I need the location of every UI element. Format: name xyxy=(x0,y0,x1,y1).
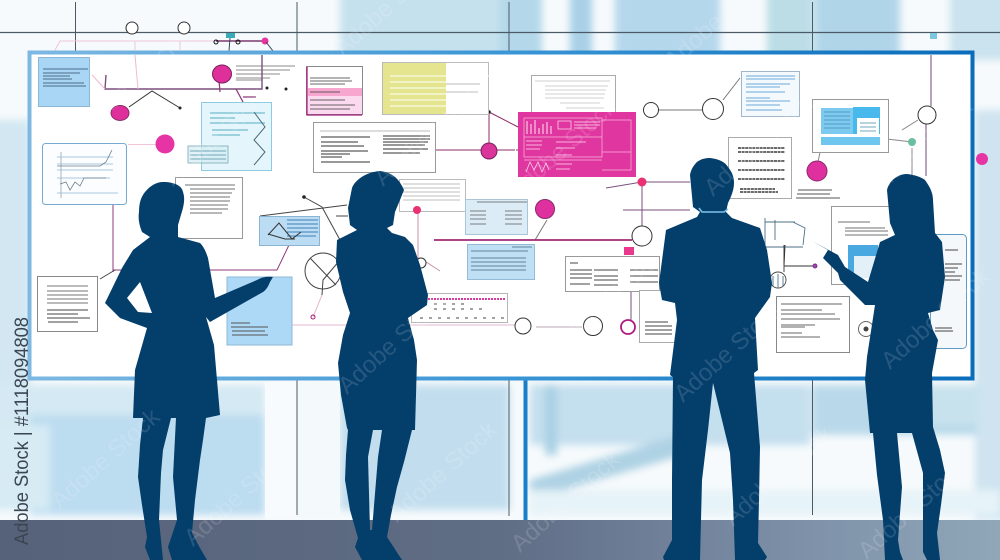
top right blue-lined document xyxy=(742,72,800,116)
document text panel near top left xyxy=(236,66,295,80)
sheet behind first woman xyxy=(176,178,242,238)
floor xyxy=(0,520,1000,560)
white doc behind magenta card xyxy=(532,76,616,116)
man silhouette xyxy=(659,158,772,560)
woman 3 silhouette xyxy=(812,174,945,560)
node circles xyxy=(111,65,988,336)
doc above center xyxy=(400,180,466,214)
stock credit: Adobe Stock | #1118094808 xyxy=(12,317,33,545)
watermarks: Adobe Stock xyxy=(876,263,996,374)
watermarks: Adobe Stock xyxy=(503,93,623,204)
watermarks: Adobe Stock xyxy=(66,33,186,144)
woman 1 silhouette xyxy=(105,182,273,560)
pale blue document with charts xyxy=(188,102,272,170)
watermarks: Adobe Stock xyxy=(159,80,279,191)
pink table strip xyxy=(412,294,508,322)
whiteboard panel xyxy=(30,52,972,378)
text sheet center right xyxy=(728,138,840,198)
watermarks: Adobe Stock xyxy=(699,90,819,201)
watermarks: Adobe Stock xyxy=(383,416,503,527)
pie chart sketch xyxy=(305,253,341,319)
bottom left document xyxy=(38,276,98,332)
large blue note by first woman xyxy=(227,277,292,345)
tablet with blue panels xyxy=(812,100,888,152)
watermarks: Adobe Stock xyxy=(539,253,659,364)
line chart card xyxy=(42,144,126,204)
light blue table notes xyxy=(466,200,534,280)
watermarks: Adobe Stock xyxy=(369,80,489,191)
table document bottom center xyxy=(566,247,660,292)
magenta dashboard card xyxy=(518,112,636,177)
watermarks: Adobe Stock xyxy=(46,403,166,514)
watermarks: Adobe Stock xyxy=(506,446,626,557)
watermarks: Adobe Stock xyxy=(859,93,979,204)
pink form document xyxy=(306,66,362,115)
lower sheet behind man xyxy=(640,290,690,342)
yellow note with sheet xyxy=(382,62,490,114)
watermarks: Adobe Stock xyxy=(333,288,453,399)
small blue chart note xyxy=(260,216,320,246)
lower text sheet xyxy=(776,296,874,352)
watermarks: Adobe Stock xyxy=(719,420,839,531)
sketch chart and flow right xyxy=(765,218,817,288)
rounded right panel xyxy=(930,234,966,348)
document with blue chart behind third woman xyxy=(832,206,896,284)
watermarks: Adobe Stock xyxy=(179,440,299,551)
network connectors xyxy=(92,55,931,327)
woman 2 silhouette xyxy=(336,171,428,560)
watermarks: Adobe Stock xyxy=(669,296,789,407)
connectors above the board xyxy=(55,22,937,64)
wide text document xyxy=(314,122,436,172)
top-left blue note xyxy=(38,58,90,106)
